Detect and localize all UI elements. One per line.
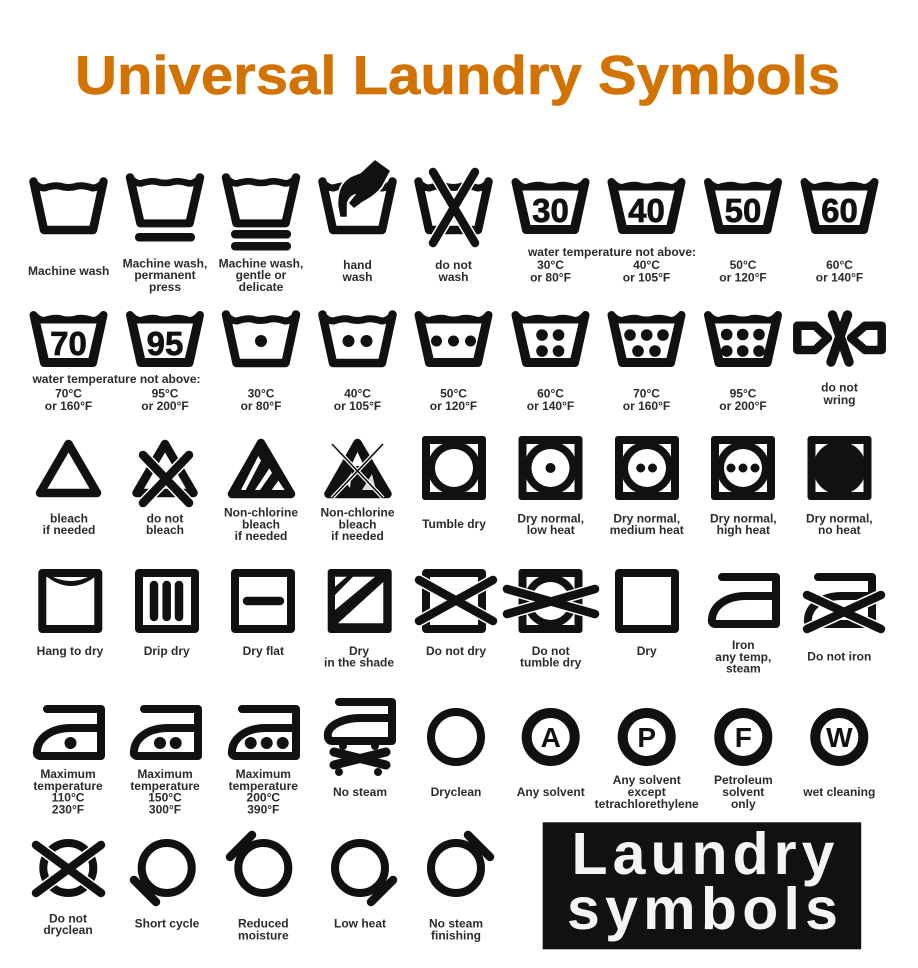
symbol: any solvent A — [517, 713, 585, 799]
symbol: do not tumble dry: Do not — [532, 644, 570, 658]
symbol: dry high heat: Dry normal, — [710, 511, 777, 525]
banner: laundry symbols: Laundry — [572, 821, 835, 887]
symbol: 40 degrees: 40 — [628, 192, 665, 229]
symbol: 30 degrees — [516, 182, 586, 284]
symbol: one dot — [226, 314, 296, 413]
symbol: drip dry — [139, 573, 195, 658]
symbol: iron 110C: Maximum — [40, 767, 96, 781]
symbol: non-chlorine bleach — [224, 443, 298, 543]
symbol: wet cleaning W — [802, 713, 875, 799]
symbol: iron 200C: 200°C — [247, 791, 280, 805]
symbol: six dots — [708, 315, 778, 413]
symbol: solvent P — [595, 713, 699, 811]
symbol: five dots — [612, 315, 682, 413]
banner: laundry symbols — [543, 821, 861, 949]
symbol: 60 degrees: 60°C — [826, 258, 853, 272]
symbol: 50 degrees: 50 — [725, 192, 761, 229]
row 4: drying and iron symbols — [37, 569, 881, 676]
symbol: do not dryclean: Do not — [49, 911, 87, 925]
symbol: do not tumble dry — [507, 569, 595, 670]
symbol: machine wash: Machine wash — [28, 264, 109, 278]
symbol: do not dryclean: dryclean — [43, 923, 93, 937]
symbol: iron 200C — [229, 709, 298, 816]
symbol: non-chlorine bleach crossed — [320, 443, 395, 543]
symbol: iron 200C: Maximum — [236, 767, 291, 781]
symbol: five dots: 70°C — [633, 386, 660, 400]
symbol: non-chlorine bleach crossed: bleach — [338, 517, 377, 531]
symbol: dry high heat — [710, 436, 777, 537]
symbol: solvent P: except — [628, 785, 666, 799]
symbol: 30 degrees: or 80°F — [530, 270, 571, 284]
symbol: gentle or delicate: gentle or — [236, 268, 287, 282]
symbol: no steam — [328, 702, 392, 799]
symbol: four dots: 60°C — [537, 386, 564, 400]
symbol: bleach if needed: if needed — [43, 523, 95, 537]
symbol: dry flat: Dry flat — [243, 644, 284, 658]
symbol: non-chlorine bleach: Non-chlorine — [224, 506, 298, 520]
symbol: 40 degrees: 40°C — [633, 258, 660, 272]
symbol: non-chlorine bleach: bleach — [242, 517, 280, 531]
symbol: iron 110C — [33, 709, 103, 816]
row 2: temperature symbols — [31, 314, 882, 413]
symbol: six dots: or 200°F — [719, 399, 767, 413]
symbol: tumble dry — [422, 436, 486, 531]
row 6: dryclean process symbols — [36, 835, 490, 942]
symbol: petroleum solvent F — [714, 713, 773, 811]
symbol: do not wring: wring — [822, 393, 856, 407]
symbol: do not wring: do not — [821, 381, 858, 395]
symbol: dry no heat: Dry normal, — [806, 511, 873, 525]
symbol: do not bleach — [136, 444, 194, 537]
symbol: tumble dry: Tumble dry — [422, 517, 486, 531]
symbol: do not wring — [797, 315, 882, 407]
symbol: dry low heat: low heat — [527, 523, 575, 537]
symbol: gentle or delicate: delicate — [239, 280, 284, 294]
symbol: solvent P: tetrachlorethylene — [595, 797, 699, 811]
symbol: one dot: or 80°F — [241, 399, 281, 413]
symbol: do not wash: wash — [437, 270, 469, 284]
symbol: dry medium heat: Dry normal, — [613, 511, 680, 525]
note: water temperature: water temperature not above: — [31, 372, 201, 386]
symbol: do not wash — [418, 172, 488, 284]
symbol: hang to dry — [37, 573, 104, 658]
symbol: reduced moisture: moisture — [238, 928, 289, 942]
symbol: dry low heat — [517, 436, 584, 537]
symbol: dry medium heat: medium heat — [610, 523, 684, 537]
symbol: 70 degrees: 70°C — [55, 386, 82, 400]
symbol: four dots — [516, 315, 586, 413]
symbol: iron 150C — [130, 709, 200, 816]
symbol: hand wash: wash — [341, 270, 373, 284]
symbol: 95 degrees: 95°C — [152, 386, 179, 400]
symbol: dry: Dry — [637, 644, 657, 658]
symbol: three dots: or 120°F — [430, 399, 477, 413]
symbol: 50 degrees: 50°C — [730, 258, 757, 272]
symbol: four dots: or 140°F — [527, 399, 574, 413]
symbol: five dots: or 160°F — [623, 399, 670, 413]
symbol: iron 200C: 390°F — [247, 802, 279, 816]
symbol: dry high heat: high heat — [717, 523, 770, 537]
symbol: 70 degrees — [34, 315, 104, 413]
symbol: 60 degrees — [804, 182, 874, 284]
symbol: permanent press: press — [149, 280, 181, 294]
symbol: low heat — [334, 843, 393, 931]
symbol: dry in the shade: Dry — [349, 644, 369, 658]
symbol: do not wash: do not — [435, 258, 472, 272]
symbol: do not dryclean — [36, 843, 101, 937]
symbol: hang to dry: Hang to dry — [37, 644, 104, 658]
symbol: petroleum solvent F: F — [735, 722, 752, 753]
symbol: 70 degrees: 70 — [50, 325, 87, 362]
symbol: wet cleaning W: W — [826, 722, 853, 753]
symbol: non-chlorine bleach: if needed — [235, 529, 287, 543]
symbol: low heat: Low heat — [334, 917, 386, 931]
symbol: no steam finishing: finishing — [431, 928, 481, 942]
symbol: 60 degrees: 60 — [821, 192, 858, 229]
symbol: dry no heat — [806, 436, 873, 537]
row 1: wash symbols — [28, 161, 874, 294]
symbol: 95 degrees — [130, 315, 200, 413]
symbol: dryclean: Dryclean — [431, 785, 481, 799]
symbol: gentle or delicate — [219, 177, 303, 294]
symbol: dry in the shade: in the shade — [324, 656, 394, 670]
symbol: bleach if needed — [40, 444, 97, 537]
symbol: 40 degrees: or 105°F — [623, 270, 670, 284]
symbol: dry in the shade — [324, 569, 394, 670]
symbol: iron any temperature steam: steam — [726, 662, 761, 676]
symbol: reduced moisture — [230, 835, 289, 942]
symbol: two dots: or 105°F — [334, 399, 381, 413]
symbol: 60 degrees: or 140°F — [816, 270, 863, 284]
symbol: iron 150C: 150°C — [148, 791, 182, 805]
symbol: 95 degrees: 95 — [147, 325, 183, 362]
symbol: 70 degrees: or 160°F — [45, 399, 92, 413]
symbol: gentle or delicate: Machine wash, — [219, 256, 303, 270]
symbol: dry no heat: no heat — [818, 523, 861, 537]
title: Universal Laundry Symbols — [75, 44, 840, 106]
symbol: six dots: 95°C — [730, 386, 757, 400]
symbol: iron 150C: Maximum — [137, 767, 193, 781]
symbol: petroleum solvent F: Petroleum — [714, 773, 773, 787]
symbol: bleach if needed: bleach — [50, 511, 88, 525]
symbol: permanent press — [123, 177, 207, 294]
symbol: one dot: 30°C — [248, 386, 275, 400]
symbol: short cycle — [134, 843, 200, 931]
symbol: do not tumble dry: tumble dry — [520, 656, 582, 670]
symbol: hand wash — [322, 161, 392, 284]
symbol: iron any temperature steam: any temp, — [715, 650, 771, 664]
symbol: iron any temperature steam — [712, 577, 776, 676]
symbol: no steam finishing: No steam — [429, 917, 483, 931]
symbol: do not iron: Do not iron — [807, 650, 871, 664]
symbol: 50 degrees: or 120°F — [719, 270, 767, 284]
symbol: do not iron — [807, 577, 881, 664]
symbol: iron any temperature steam: Iron — [732, 638, 755, 652]
symbol: permanent press: permanent — [134, 268, 196, 282]
symbol: 50 degrees — [708, 182, 778, 284]
symbol: do not bleach: bleach — [146, 523, 184, 537]
symbol: non-chlorine bleach crossed: if needed — [331, 529, 384, 543]
symbol: reduced moisture: Reduced — [238, 917, 289, 931]
symbol: two dots: 40°C — [344, 386, 371, 400]
row 3: bleach and tumble dry symbols — [40, 436, 873, 543]
symbol: solvent P: Any solvent — [613, 773, 681, 787]
symbol: hand wash: hand — [343, 258, 372, 272]
symbol: dry medium heat — [610, 436, 684, 537]
symbol: machine wash — [28, 182, 109, 278]
note: water temperature: water temperature not above: — [527, 245, 696, 259]
symbol: solvent P: P — [637, 722, 656, 753]
symbol: dry — [619, 573, 675, 658]
symbol: any solvent A: A — [541, 722, 561, 753]
banner: laundry symbols: symbols — [567, 876, 838, 942]
symbol: 95 degrees: or 200°F — [141, 399, 189, 413]
symbol: iron 200C: temperature — [229, 779, 298, 793]
symbol: do not bleach: do not — [147, 511, 183, 525]
symbol: iron 110C: 110°C — [52, 791, 85, 805]
symbol: dryclean — [431, 712, 481, 799]
symbol: any solvent A: Any solvent — [517, 785, 585, 799]
symbol: dry low heat: Dry normal, — [517, 511, 584, 525]
symbol: drip dry: Drip dry — [144, 644, 190, 658]
symbol: short cycle: Short cycle — [135, 917, 200, 931]
symbol: three dots — [418, 315, 488, 413]
symbol: two dots — [322, 314, 392, 413]
symbol: wet cleaning W: wet cleaning — [802, 785, 875, 799]
symbol: dry flat — [235, 573, 291, 658]
symbol: no steam finishing — [429, 835, 490, 942]
row 5: iron temperatures and dryclean symbols — [33, 702, 875, 816]
symbol: 40 degrees — [612, 182, 682, 284]
symbol: 30 degrees: 30°C — [537, 258, 564, 272]
symbol: permanent press: Machine wash, — [123, 256, 207, 270]
symbol: iron 110C: 230°F — [52, 802, 84, 816]
symbol: non-chlorine bleach crossed: Non-chlorine — [320, 506, 395, 520]
symbol: three dots: 50°C — [440, 386, 467, 400]
symbol: no steam: No steam — [333, 785, 387, 799]
symbol: iron 150C: temperature — [130, 779, 200, 793]
symbol: 30 degrees: 30 — [532, 192, 569, 229]
symbol: do not dry: Do not dry — [426, 644, 486, 658]
symbol: iron 150C: 300°F — [149, 802, 181, 816]
symbol: do not dry — [419, 573, 493, 658]
symbol: petroleum solvent F: solvent — [722, 785, 764, 799]
symbol: iron 110C: temperature — [33, 779, 103, 793]
symbol: petroleum solvent F: only — [731, 797, 756, 811]
